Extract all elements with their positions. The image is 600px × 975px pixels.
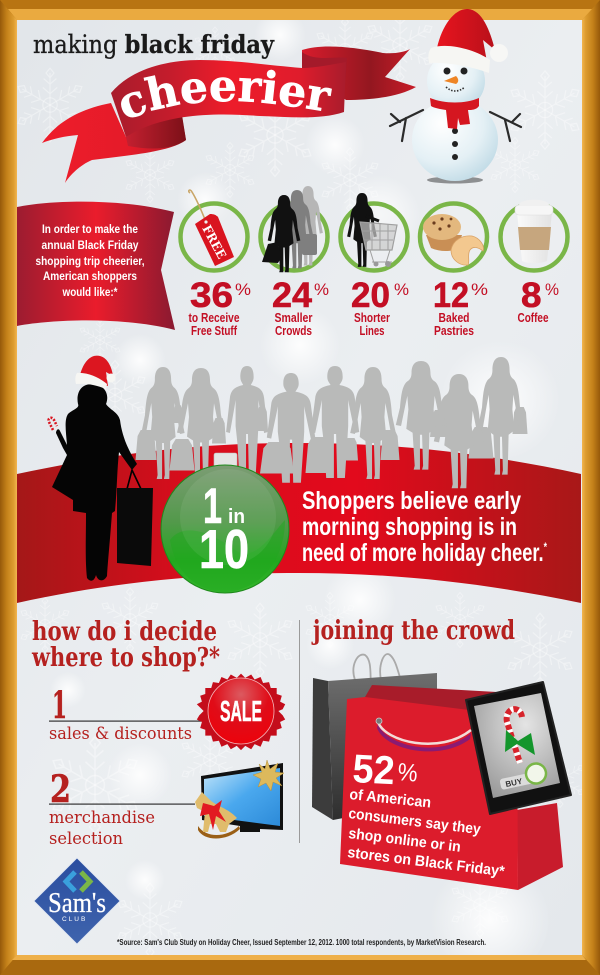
snowman body bbox=[412, 99, 498, 181]
icon: tv with rocking horse bbox=[195, 760, 284, 838]
intro text: would like:* bbox=[62, 285, 118, 299]
main shopper silhouette bbox=[49, 356, 153, 581]
stat: baked pastries bbox=[420, 204, 488, 338]
ring bbox=[180, 204, 248, 270]
crowd bags bbox=[136, 405, 528, 474]
stat: smaller crowds: % bbox=[314, 280, 329, 299]
bag statistic: % bbox=[396, 758, 419, 788]
stat: smaller crowds bbox=[260, 186, 329, 338]
band statement: * bbox=[544, 540, 547, 554]
logo chevrons bbox=[66, 872, 90, 891]
rocking horse bbox=[198, 826, 240, 838]
intro text: shopping trip cheerier, bbox=[36, 254, 144, 268]
band statement: morning shopping is in bbox=[302, 513, 517, 541]
label: Shorter bbox=[354, 311, 390, 325]
ornament text: 1 bbox=[203, 478, 222, 534]
reason 1: sales & discounts bbox=[49, 724, 192, 743]
stat: free stuff: % bbox=[235, 280, 251, 299]
reason 2: selection bbox=[49, 829, 123, 848]
bag statistic: 52 bbox=[352, 747, 396, 793]
ribbon left tail bbox=[42, 103, 186, 183]
ornament text: 10 bbox=[199, 518, 249, 580]
20 percent: 20 bbox=[351, 276, 390, 315]
logo: Sam's Club bbox=[34, 858, 120, 944]
intro text: American shoppers bbox=[43, 269, 137, 283]
icon: free tag bbox=[189, 190, 234, 266]
snowman buttons bbox=[452, 128, 458, 160]
stat: baked pastries: % bbox=[471, 280, 488, 299]
ornament: 1 in 10 bbox=[161, 453, 289, 593]
reason 2: merchandise bbox=[49, 808, 155, 827]
source footnote: *Source: Sam's Club Study on Holiday Cheer, Issued September 12, 2012. 1000 total respondents, by MarketVision Research. bbox=[117, 938, 486, 947]
santa hat bbox=[428, 9, 508, 73]
reason 2 bbox=[49, 767, 195, 848]
label: to Receive bbox=[188, 311, 240, 325]
stat: shorter lines bbox=[340, 193, 409, 338]
bag statistic: stores on Black Friday* bbox=[347, 844, 506, 880]
shopping bag bbox=[117, 470, 153, 566]
label bbox=[354, 311, 390, 338]
reason 2: 2 bbox=[50, 767, 71, 811]
ornament text: in bbox=[228, 506, 245, 528]
banner ribbon bbox=[42, 46, 416, 183]
36 percent: 36 bbox=[190, 276, 233, 315]
black shopping bag bbox=[312, 654, 437, 820]
ribbon main band bbox=[111, 60, 346, 137]
icon: shopper with cart bbox=[347, 193, 397, 267]
label bbox=[434, 311, 474, 338]
heading bbox=[31, 617, 220, 673]
label bbox=[188, 311, 240, 338]
reason 1 bbox=[49, 683, 201, 743]
snowman scarf bbox=[430, 98, 479, 129]
label: Crowds bbox=[275, 324, 312, 338]
24 percent: 24 bbox=[272, 276, 313, 315]
ornament ball bbox=[161, 465, 289, 593]
ring bbox=[340, 204, 408, 270]
icon: coffee cup bbox=[515, 200, 553, 263]
bag statistic bbox=[347, 747, 506, 880]
stat: coffee bbox=[500, 200, 568, 325]
panel: intro ribbon bbox=[17, 202, 175, 330]
snowman head bbox=[427, 52, 485, 110]
bag statistic: shop online or in bbox=[348, 825, 462, 856]
heading: where to shop?* bbox=[31, 643, 220, 673]
icon: sale badge bbox=[197, 674, 285, 750]
body bbox=[52, 384, 137, 581]
cheerier word: cheerier bbox=[121, 70, 332, 118]
ring bbox=[500, 204, 568, 270]
intro text: In order to make the bbox=[42, 222, 138, 236]
icon: muffin and croissant bbox=[423, 214, 483, 265]
crowd of grey shoppers bbox=[136, 357, 528, 488]
ring bbox=[260, 204, 328, 270]
ring bbox=[420, 204, 487, 270]
bag statistic: of American bbox=[349, 786, 432, 812]
icon: free tag: FREE bbox=[199, 222, 229, 261]
red curved band bbox=[17, 443, 581, 603]
label: Pastries bbox=[434, 324, 474, 338]
label: Smaller bbox=[274, 311, 313, 325]
icon: candy cane and bow bbox=[505, 709, 535, 763]
stat: free stuff bbox=[180, 190, 251, 338]
panel: joining the crowd bbox=[311, 616, 571, 890]
snowman arms bbox=[390, 110, 521, 141]
heading: joining the crowd bbox=[311, 616, 515, 646]
red shopping bag bbox=[340, 685, 563, 890]
label bbox=[274, 311, 313, 338]
icon: three shoppers bbox=[262, 186, 323, 272]
cheerier word path bbox=[125, 101, 334, 121]
12 percent: 12 bbox=[433, 276, 469, 315]
reason 1: 1 bbox=[52, 683, 67, 727]
ribbon right tail bbox=[302, 46, 416, 100]
title line: making black friday bbox=[33, 30, 275, 59]
crowd figures bbox=[141, 357, 524, 488]
ribbon folds bbox=[126, 115, 186, 148]
snowman bbox=[390, 9, 521, 184]
snowman shadow bbox=[427, 176, 483, 184]
tablet bbox=[466, 682, 571, 814]
logo: Sam's Club: CLUB bbox=[62, 916, 87, 923]
band statement: Shoppers believe early bbox=[302, 487, 521, 515]
intro text bbox=[36, 222, 144, 299]
stat: coffee: % bbox=[545, 280, 559, 299]
heading: how do i decide bbox=[32, 617, 217, 647]
label: Lines bbox=[360, 324, 385, 338]
intro text: annual Black Friday bbox=[42, 238, 139, 252]
band statement bbox=[302, 487, 547, 567]
candy cane bbox=[49, 418, 57, 430]
santa hat on shopper bbox=[75, 356, 116, 389]
label: Free Stuff bbox=[191, 324, 238, 338]
label: Coffee bbox=[518, 311, 549, 325]
logo: Sam's Club: Sam's bbox=[48, 888, 106, 919]
panel: how do i decide bbox=[31, 617, 285, 848]
ornament cap bbox=[214, 453, 237, 468]
icon: sale badge: SALE bbox=[220, 696, 262, 728]
bag statistic: consumers say they bbox=[348, 805, 482, 838]
divider bbox=[299, 620, 300, 843]
buy button: BUY bbox=[505, 777, 524, 789]
label: Baked bbox=[438, 311, 470, 325]
stat: shorter lines: % bbox=[394, 280, 409, 299]
ornament text bbox=[199, 478, 249, 580]
snowman eyes and nose bbox=[444, 68, 468, 91]
8 percent: 8 bbox=[521, 276, 542, 315]
